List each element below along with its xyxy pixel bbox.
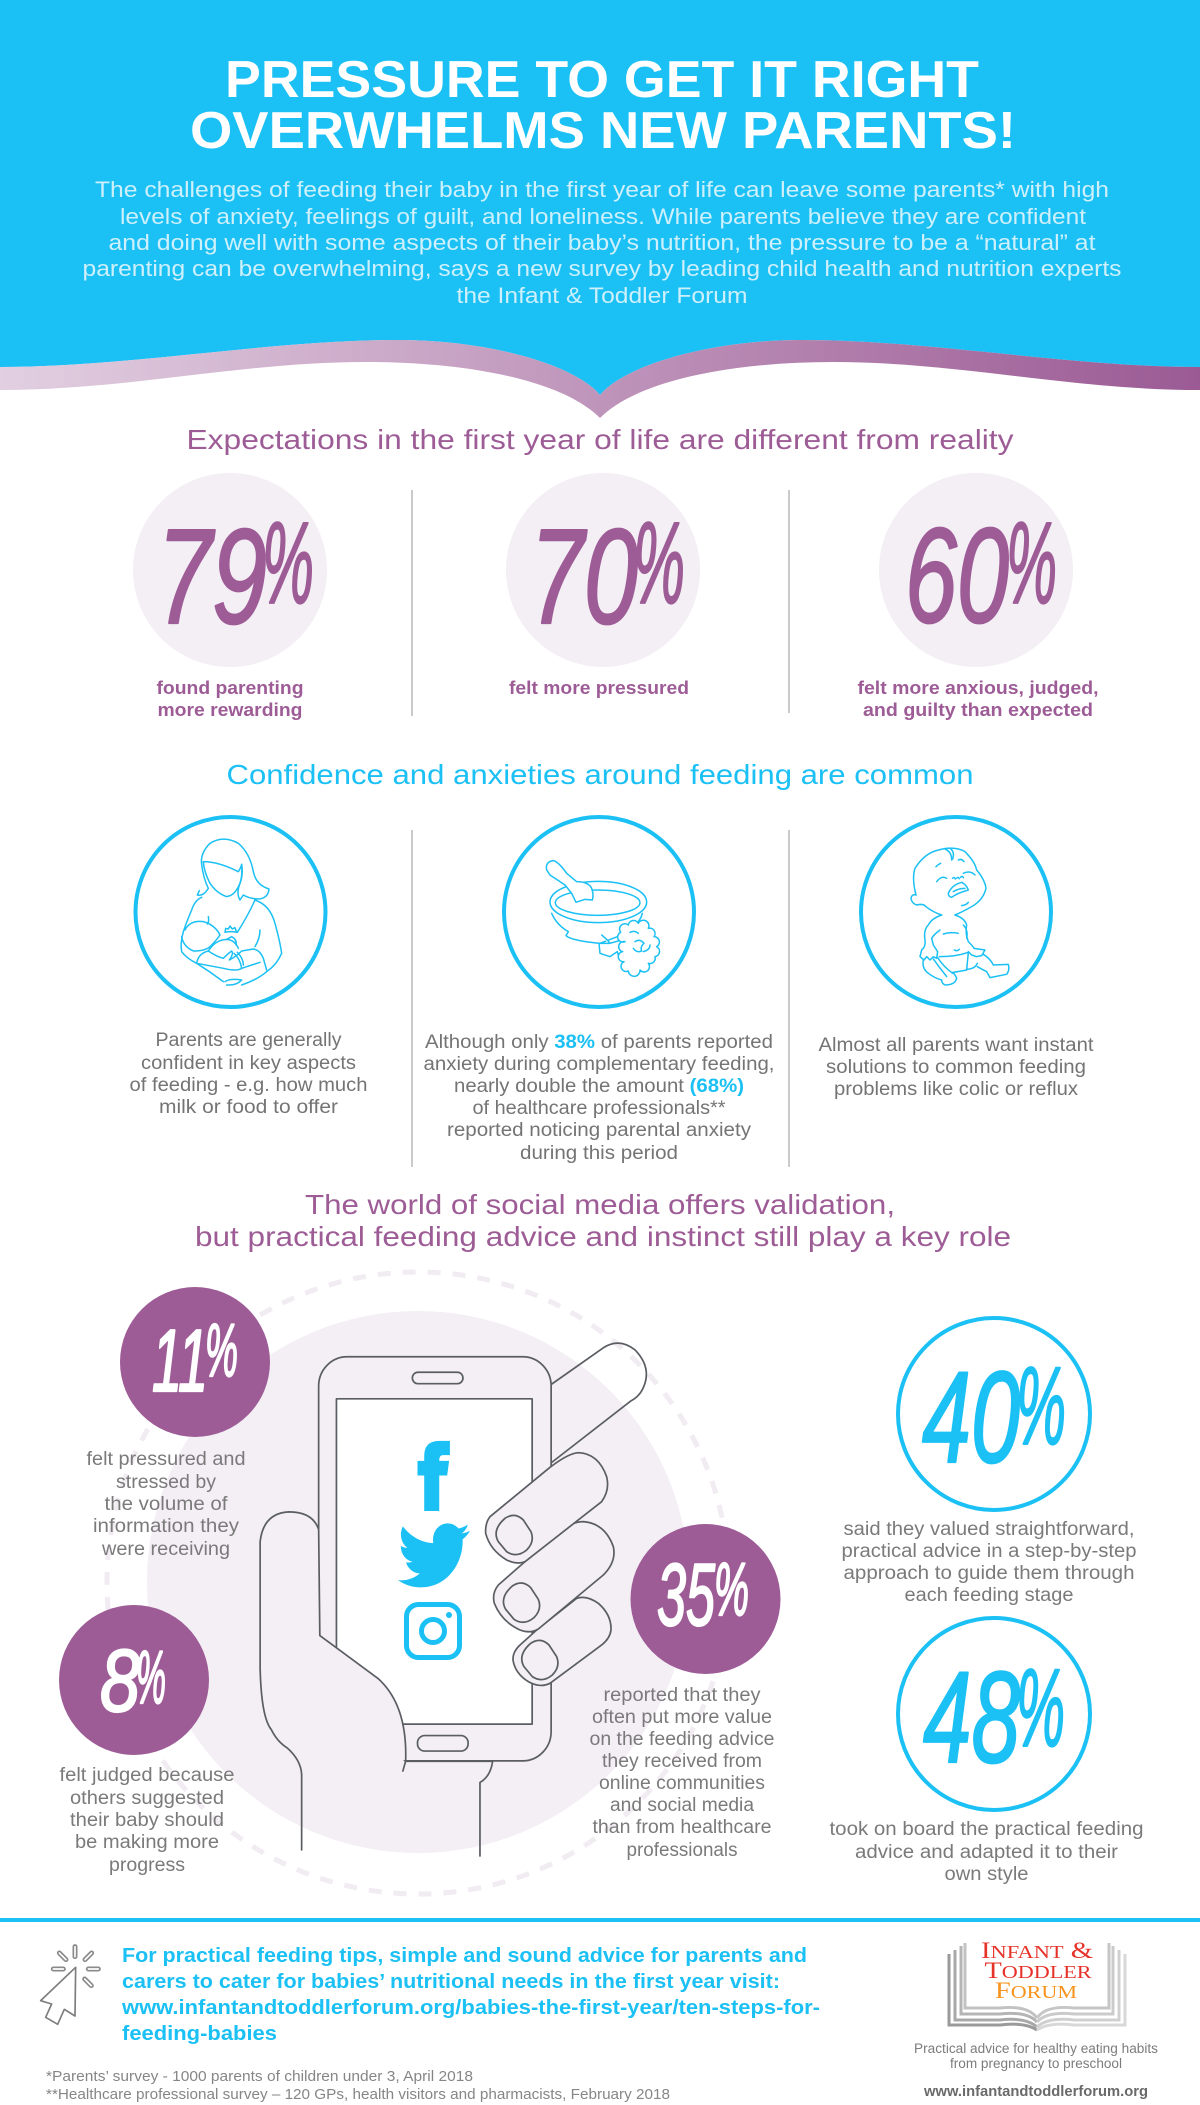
stat: 40%: % [1016, 1345, 1066, 1468]
stat: 48% [830, 1618, 1144, 1885]
stat: 60%: % [1006, 498, 1057, 628]
stat: 35%: on the feeding advice [590, 1729, 774, 1750]
stat: 8% [59, 1605, 234, 1876]
stat: 60%: 60 [905, 500, 1009, 651]
icon: twitter [398, 1523, 470, 1587]
stat: 8%: progress [109, 1855, 185, 1876]
heading: social media: but practical feeding advice and instinct still play a key role [195, 1221, 1011, 1252]
intro paragraph: levels of anxiety, feelings of guilt, and loneliness. While parents believe they are confident [120, 204, 1086, 229]
stat: 11%: the volume of [104, 1494, 228, 1515]
footnotes: *Parents’ survey - 1000 parents of children under 3, April 2018 [46, 2068, 473, 2085]
stat: 11% [86, 1287, 270, 1560]
illustration: hand holding phone [260, 1343, 646, 1856]
stat: 40%: said they valued straightforward, [844, 1519, 1134, 1540]
background circles [107, 1272, 729, 1894]
logo wordmark: FORUM [995, 1978, 1077, 2003]
finger one [486, 1453, 608, 1563]
logo strapline: Practical advice for healthy eating habits [914, 2041, 1158, 2056]
intro paragraph [82, 177, 1122, 308]
hand outline [260, 1512, 493, 1856]
stat: 48%: % [1016, 1647, 1065, 1770]
stat: 40%: approach to guide them through [844, 1563, 1134, 1584]
call to action: feeding-babies [122, 2022, 277, 2045]
logo: Infant and Toddler Forum [949, 1938, 1125, 2030]
book pages [949, 1943, 1125, 2030]
stat: 40%: 40 [922, 1344, 1020, 1490]
stat: 70%: % [633, 498, 685, 628]
text: instant solutions: Almost all parents want instant [818, 1035, 1094, 1056]
stat: 79%: % [262, 498, 314, 628]
footnotes [46, 2068, 670, 2103]
stat: 11%: felt pressured and [86, 1449, 246, 1470]
heading: social media: The world of social media offers validation, [305, 1189, 895, 1220]
text: anxiety during complementary feeding: nearly double the amount (68%) [454, 1076, 744, 1097]
intro paragraph: the Infant & Toddler Forum [456, 283, 748, 308]
stat: 35%: often put more value [592, 1707, 772, 1728]
stat: 35%: and social media [610, 1795, 754, 1816]
stat: 35%: than from healthcare [592, 1817, 772, 1838]
stat: 70% [506, 473, 700, 698]
stat: 48%: advice and adapted it to their [855, 1842, 1119, 1863]
logo wordmark [981, 1938, 1093, 2003]
panel: expectations statistics [133, 473, 1098, 720]
text: instant solutions [818, 1035, 1094, 1100]
title: PRESSURE TO GET IT RIGHT [225, 51, 979, 109]
finger behind phone [551, 1343, 646, 1463]
icon: crying baby [911, 848, 1009, 985]
icon: instagram [406, 1604, 460, 1658]
logo strapline [914, 2041, 1158, 2071]
intro paragraph: and doing well with some aspects of their baby’s nutrition, the pressure to be a “natural” at [108, 230, 1096, 255]
stat: 79%: found parenting [156, 678, 304, 698]
stat: 35%: % [714, 1547, 749, 1631]
stat: 8%: felt judged because [60, 1765, 234, 1786]
call to action [121, 1944, 820, 2045]
stat: 8%: others suggested [70, 1788, 224, 1809]
call to action: For practical feeding tips, simple and sound advice for parents and [122, 1944, 807, 1967]
intro paragraph: The challenges of feeding their baby in the first year of life can leave some parents* with high [95, 177, 1109, 202]
footnotes: **Healthcare professional survey – 120 GPs, health visitors and pharmacists, February 2018 [46, 2086, 670, 2103]
stat: 8%: 8 [100, 1631, 140, 1730]
heading: expectations: Expectations in the first year of life are different from reality [186, 424, 1014, 455]
logo strapline: from pregnancy to preschool [950, 2056, 1122, 2071]
stat: 35%: reported that they [604, 1685, 761, 1706]
stat: 40%: each feeding stage [904, 1585, 1074, 1606]
header banner [0, 0, 1200, 418]
logo wordmark: TODDLER [984, 1958, 1092, 1983]
title [190, 51, 1016, 160]
phone screen [336, 1399, 532, 1724]
stat: 35%: 35 [657, 1545, 716, 1644]
text: instant solutions: problems like colic or reflux [834, 1079, 1079, 1100]
nail one [496, 1515, 532, 1555]
stat: 79%: more rewarding [158, 700, 302, 720]
stat: 79%: 79 [157, 501, 267, 652]
phone home button [417, 1736, 468, 1751]
stat: 35% [590, 1524, 780, 1861]
text: parents confident [130, 1030, 368, 1118]
stat: 60%: and guilty than expected [863, 700, 1093, 720]
palm fill [260, 1512, 493, 1791]
stat: 40%: practical advice in a step-by-step [842, 1541, 1136, 1562]
intro paragraph: parenting can be overwhelming, says a new survey by leading child health and nutrition experts [82, 256, 1122, 281]
text: anxiety during complementary feeding [424, 1032, 774, 1164]
stat: 11%: % [205, 1308, 238, 1392]
text: anxiety during complementary feeding: anxiety during complementary feeding, [424, 1054, 774, 1075]
heading: confidence: Confidence and anxieties around feeding are common [226, 759, 974, 790]
finger two [494, 1522, 614, 1632]
stat: 35%: professionals [626, 1840, 738, 1861]
stat: 8%: % [136, 1635, 166, 1719]
title: OVERWHELMS NEW PARENTS! [190, 102, 1016, 160]
website: www.infantandtoddlerforum.org [923, 2083, 1148, 2100]
stat: 11%: 11 [152, 1311, 208, 1410]
panel: feeding confidence [130, 817, 1094, 1167]
logo wordmark: INFANT & [981, 1938, 1093, 1963]
text: anxiety during complementary feeding: reported noticing parental anxiety [447, 1120, 752, 1141]
text: anxiety during complementary feeding: of healthcare professionals** [472, 1098, 726, 1119]
icon: mother breastfeeding [181, 839, 282, 985]
finger three [513, 1597, 611, 1685]
stat: 60% [858, 473, 1098, 720]
text: parents confident: of feeding - e.g. how much [130, 1075, 368, 1096]
icon: facebook [417, 1441, 450, 1511]
text: anxiety during complementary feeding: during this period [520, 1143, 678, 1164]
phone body [319, 1357, 551, 1761]
call to action: www.infantandtoddlerforum.org/babies-the-first-year/ten-steps-for- [121, 1996, 820, 2019]
stat: 35%: online communities [599, 1773, 765, 1794]
text: instant solutions: solutions to common feeding [826, 1057, 1086, 1078]
heading: social media [195, 1189, 1011, 1252]
call to action: carers to cater for babies’ nutritional needs in the first year visit: [122, 1970, 780, 1993]
stat: 11%: were receiving [101, 1539, 230, 1560]
open book ribbon [0, 340, 1200, 418]
stat: 8%: be making more [75, 1832, 219, 1853]
stat: 40% [842, 1318, 1136, 1606]
text: parents confident: confident in key aspects [141, 1053, 356, 1074]
stat: 60%: felt more anxious, judged, [858, 678, 1098, 698]
stat: 35%: they received from [602, 1751, 762, 1772]
stat: 8%: their baby should [70, 1810, 224, 1831]
nail three [522, 1640, 558, 1680]
nail two [503, 1583, 540, 1622]
stat: 79% [133, 473, 327, 720]
stat: 48%: 48 [923, 1644, 1020, 1790]
footer rule [0, 1918, 1200, 1922]
icon: cursor click [41, 1945, 100, 2024]
stat: 11%: stressed by [116, 1472, 217, 1493]
stat: 11%: information they [93, 1516, 240, 1537]
stat: 48%: took on board the practical feeding [830, 1819, 1144, 1840]
fingers [486, 1453, 614, 1685]
stat: 70%: felt more pressured [509, 678, 689, 698]
phone speaker [412, 1372, 463, 1384]
text: parents confident: milk or food to offer [159, 1097, 339, 1118]
stat: 48%: own style [944, 1864, 1028, 1885]
text: parents confident: Parents are generally [156, 1030, 342, 1051]
stat: 70%: 70 [530, 501, 638, 652]
text: anxiety during complementary feeding: Although only 38% of parents reported [425, 1032, 773, 1053]
icon: bowl, spoon and broccoli [546, 861, 660, 976]
